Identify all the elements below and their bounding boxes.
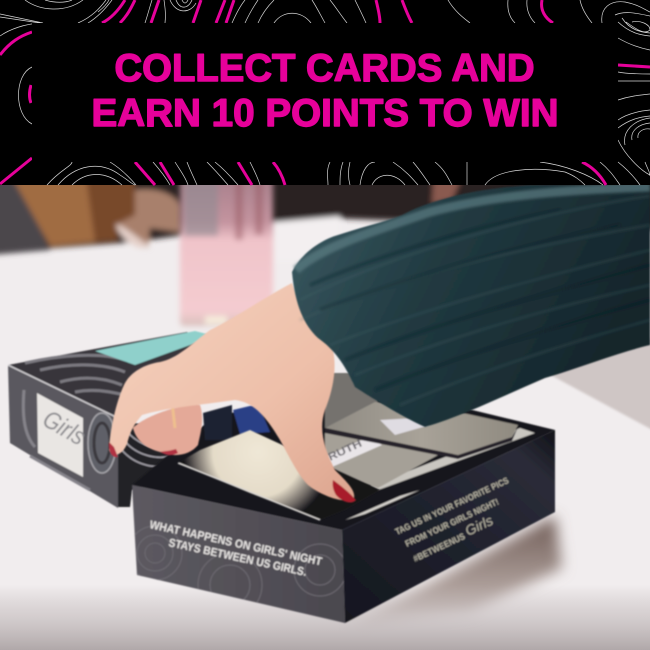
- back of hand and index finger: [109, 283, 354, 500]
- left face slogan: STAYS BETWEEN US GIRLS.: [167, 537, 308, 579]
- right background wall beyond table: [545, 335, 650, 434]
- tan player card with name label: [325, 432, 438, 488]
- box shadow on table: [350, 516, 562, 626]
- back game box: [8, 331, 240, 508]
- box interior: [132, 378, 555, 530]
- dark reflective top card: [325, 402, 518, 459]
- front game box: [128, 373, 555, 623]
- under fingers: [133, 405, 202, 455]
- magenta contour lines: [0, 0, 650, 185]
- tan player card with name label: RUTH: [326, 438, 364, 464]
- title: [92, 47, 558, 135]
- box lid top: [8, 332, 240, 418]
- right face social text: TAG US IN YOUR FAVORITE PICS: [394, 475, 510, 537]
- right box face: [342, 430, 555, 623]
- title: COLLECT CARDS AND: [114, 47, 534, 90]
- table surface: [0, 185, 650, 650]
- right face social text: [394, 475, 510, 564]
- right face social text: Girls: [463, 512, 495, 539]
- card held under the finger: [178, 430, 380, 520]
- logo script: Girls: [38, 405, 90, 451]
- left face slogan: WHAT HAPPENS ON GIRLS' NIGHT: [148, 519, 323, 568]
- blurred background: [0, 170, 650, 262]
- left box face: [132, 485, 345, 623]
- drinking glass: [180, 178, 273, 326]
- hand: [109, 283, 356, 502]
- box end with contour rings: [116, 418, 200, 507]
- box side face: [8, 365, 118, 508]
- photo: hand drawing a card from the game box: [0, 170, 650, 650]
- right face social text: FROM YOUR GIRLS NIGHT!: [404, 497, 500, 549]
- floor gradient: [0, 585, 650, 650]
- title panel: [32, 23, 618, 162]
- title: EARN 10 POINTS TO WIN: [92, 92, 558, 135]
- nails: [109, 442, 118, 457]
- teal card on box: [95, 331, 215, 365]
- header banner: [0, 0, 650, 185]
- box logo label: [37, 393, 83, 477]
- knit sweater sleeve: [292, 185, 650, 427]
- right face social text: #BETWEENUS: [412, 531, 467, 564]
- white topographic contour lines: [0, 0, 650, 185]
